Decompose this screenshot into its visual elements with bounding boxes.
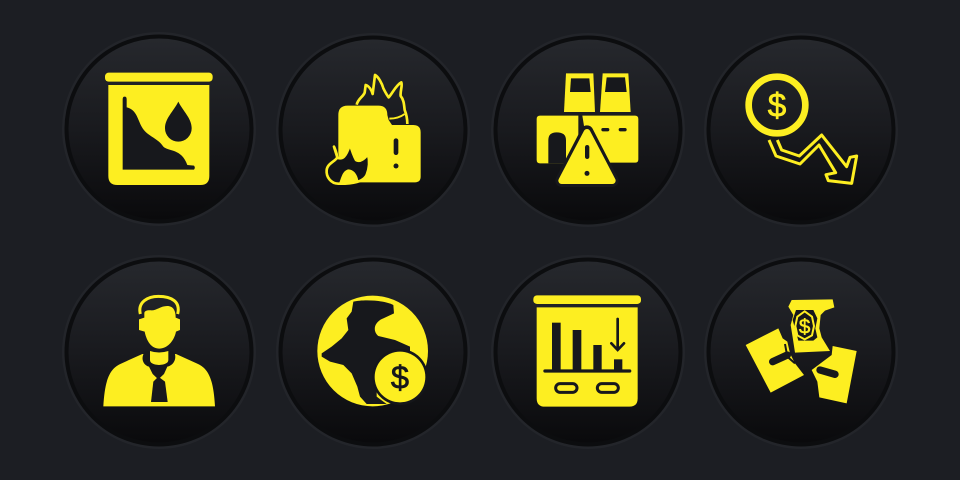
button disk	[704, 255, 898, 449]
icon: oil chart board	[105, 73, 213, 185]
icon: businessman	[103, 296, 215, 406]
button disk	[276, 33, 470, 227]
button disk	[491, 255, 685, 449]
icon: bar chart board	[533, 295, 641, 407]
panel: businessman	[62, 255, 256, 449]
icon: factory on fire	[327, 75, 421, 184]
button disk	[704, 33, 898, 227]
panel: dollar falling	[704, 33, 898, 227]
button disk	[62, 255, 256, 449]
icon: coin with down arrow: $	[768, 88, 786, 125]
button disk	[62, 32, 256, 226]
icon: torn dollar bill: $	[799, 315, 811, 338]
panel: declining bar chart	[491, 255, 685, 449]
panel: burning factory	[276, 33, 470, 227]
icon: globe with dollar coin: $	[391, 359, 409, 396]
button disk	[491, 33, 685, 227]
button disk	[276, 255, 470, 449]
panel: oil price decline	[62, 32, 256, 226]
panel: global money	[276, 255, 470, 449]
icon: factory with warning triangle	[537, 73, 638, 181]
panel: factory warning	[491, 33, 685, 227]
icon: coin with down arrow	[749, 77, 857, 183]
icon: torn dollar bill	[746, 299, 857, 403]
panel: torn banknote	[704, 255, 898, 449]
icon: globe with dollar coin	[317, 296, 428, 406]
